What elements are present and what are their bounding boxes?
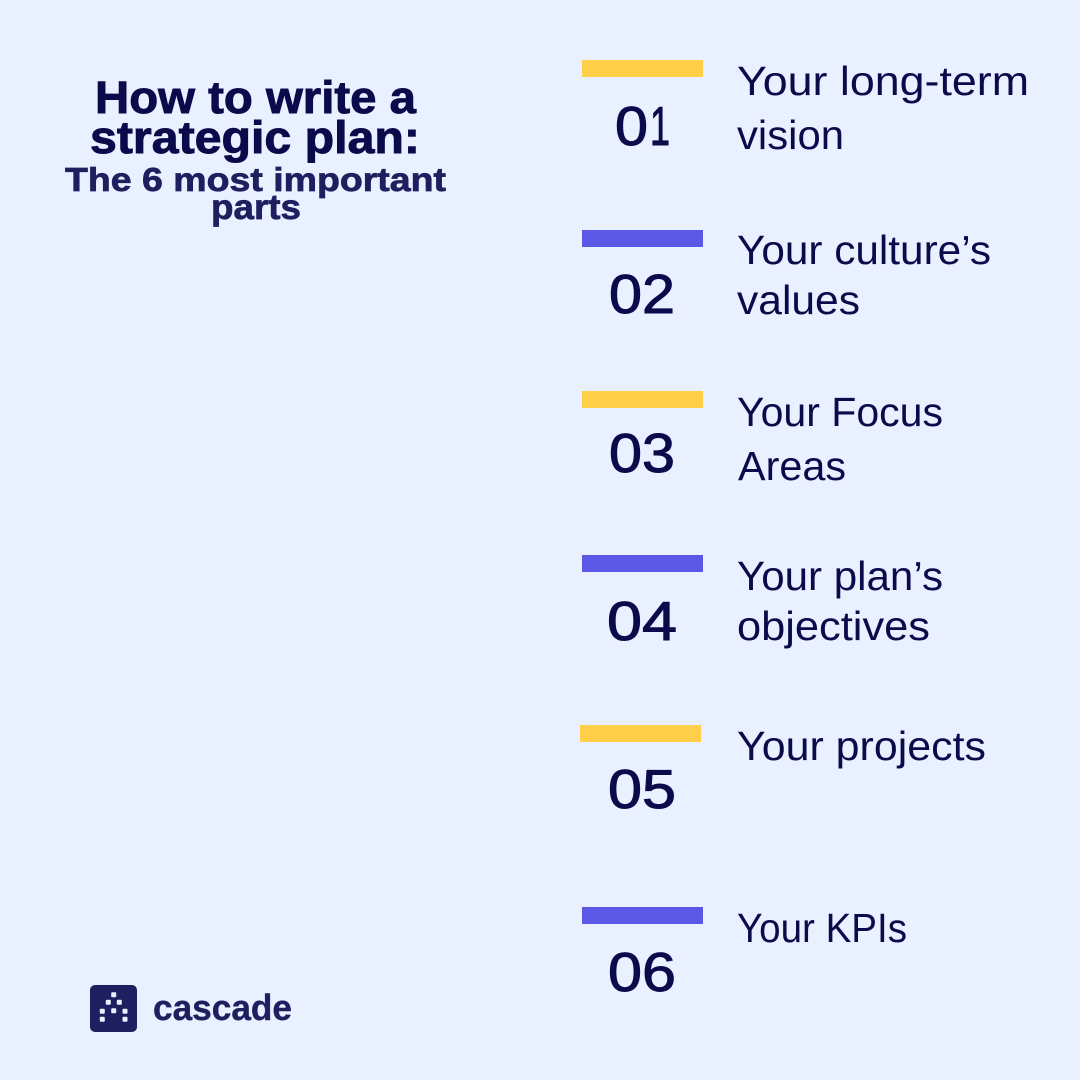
subtitle: The 6 most important	[65, 161, 446, 198]
title: How to write a	[95, 72, 417, 123]
item 02: culture's values: 02	[609, 263, 675, 325]
item 05: projects: 05	[608, 758, 676, 820]
item 04: plan's objectives: objectives	[737, 603, 930, 649]
item 06: KPIs: Your KPIs	[737, 905, 907, 951]
subtitle	[65, 161, 446, 227]
title: strategic plan:	[90, 112, 420, 163]
icon: cascade mark	[90, 985, 137, 1032]
item 01: long-term vision: 1	[650, 95, 670, 157]
item 02: culture's values	[582, 227, 991, 325]
item 02: culture's values: Your culture’s	[737, 227, 991, 273]
item 03: focus areas: Your Focus	[737, 389, 943, 435]
subtitle: parts	[211, 188, 301, 227]
item 01: long-term vision: vision	[737, 112, 844, 158]
item 05: projects	[580, 723, 986, 820]
logo: cascade	[90, 985, 292, 1032]
item 03: focus areas	[582, 389, 943, 489]
item 05: projects: Your projects	[737, 723, 986, 769]
item 03: focus areas: 03	[609, 422, 675, 484]
item 01: long-term vision: Your long-term	[737, 58, 1029, 104]
item 04: plan's objectives: 04	[607, 590, 677, 652]
item 04: plan's objectives: Your plan’s	[737, 553, 943, 599]
item 03: focus areas: Areas	[738, 443, 846, 489]
item 01: long-term vision	[582, 58, 1029, 158]
item 01: long-term vision: 0	[615, 95, 648, 157]
item 02: culture's values: values	[737, 277, 860, 323]
wordmark: cascade	[153, 987, 292, 1028]
item 04: plan's objectives	[582, 553, 943, 652]
item 06: KPIs: 06	[608, 941, 676, 1003]
title	[90, 72, 420, 163]
item 06: KPIs	[582, 905, 907, 1003]
